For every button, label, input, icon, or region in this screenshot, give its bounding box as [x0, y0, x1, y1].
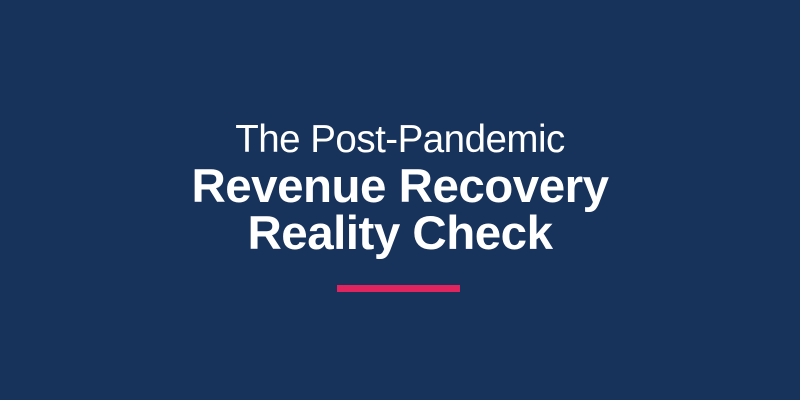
title: main heading: Reality Check [247, 207, 553, 260]
title: main heading [191, 160, 609, 260]
title: subtitle line: The Post-Pandemic [235, 118, 565, 161]
title: main heading: Revenue Recovery [191, 160, 609, 213]
accent bar [337, 285, 460, 292]
